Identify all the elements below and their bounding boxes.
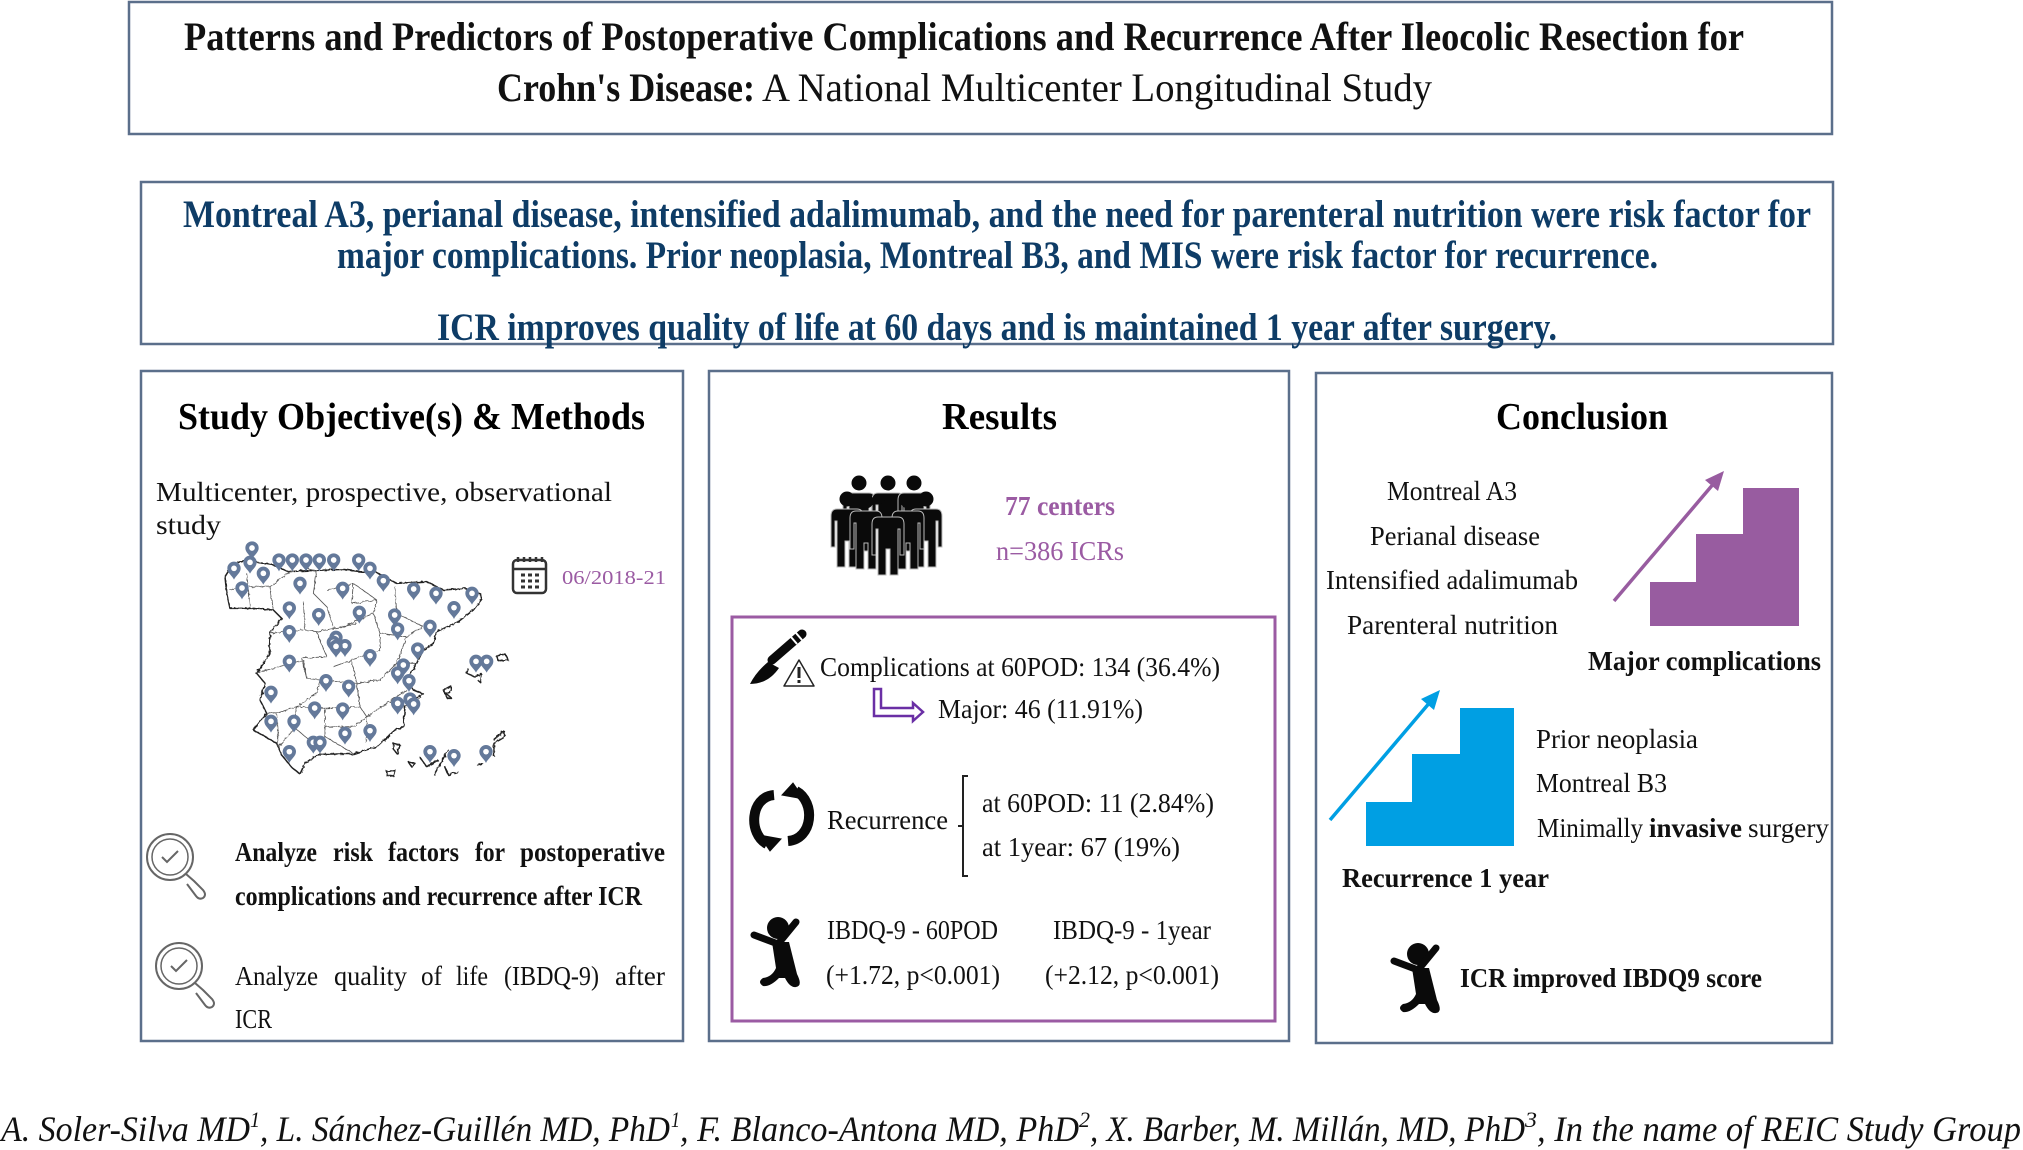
authors: , L. Sánchez-Guillén MD, PhD bbox=[260, 1109, 670, 1149]
recurrence label: Recurrence bbox=[827, 805, 948, 835]
IBDQ9 conclusion: ICR improved IBDQ9 score bbox=[1460, 963, 1762, 993]
authors: 2 bbox=[1079, 1107, 1090, 1132]
panel: study objectives and methods bbox=[141, 371, 683, 1041]
major complication risk factors bbox=[1326, 476, 1578, 640]
objective 1 text: postoperative bbox=[520, 837, 665, 867]
IBDQ-9 at 60POD bbox=[826, 915, 1000, 990]
sample size: n=386 ICRs bbox=[996, 536, 1124, 566]
objective 2 text: ICR bbox=[235, 1004, 272, 1034]
recurrence label: Recurrence 1 year bbox=[1342, 863, 1549, 893]
centers count: 77 centers bbox=[1005, 491, 1115, 521]
title box: Crohn's Disease: bbox=[497, 65, 755, 110]
recurrence risk factors: invasive bbox=[1649, 813, 1742, 843]
authors: 1 bbox=[250, 1107, 260, 1132]
title box: Patterns and Predictors of Postoperative Complications and Recurrence After Ileocolic Resection for bbox=[184, 14, 1744, 59]
title box: A National Multicenter Longitudinal Study bbox=[762, 65, 1432, 110]
objective 2 text: life bbox=[456, 961, 488, 991]
blue stairs bbox=[1366, 708, 1514, 846]
objective 2 text: after bbox=[615, 961, 665, 991]
key findings box: major complications. Prior neoplasia, Montreal B3, and MIS were risk factor for recurrence. bbox=[337, 234, 1658, 277]
objective 1 text: factors bbox=[388, 837, 459, 867]
recurrence risk factors: Prior neoplasia bbox=[1536, 724, 1698, 754]
objective 1 text bbox=[235, 837, 665, 911]
panel: conclusion bbox=[1316, 373, 1832, 1043]
authors bbox=[0, 1107, 2021, 1149]
objective 2 text: quality bbox=[334, 961, 407, 991]
major complication risk factors: Intensified adalimumab bbox=[1326, 565, 1578, 595]
recurrence at 1 year: at 1year: 67 (19%) bbox=[982, 832, 1180, 862]
icon: recurrence arrows bbox=[754, 783, 809, 851]
objective 1 text: Analyze bbox=[235, 837, 317, 867]
arrow to major complications bbox=[874, 689, 923, 721]
bracket bbox=[958, 776, 968, 876]
objective 2 text bbox=[235, 961, 665, 1034]
blue arrow bbox=[1330, 690, 1440, 820]
icon: jumping person bbox=[1394, 943, 1440, 1013]
major complication risk factors: Montreal A3 bbox=[1387, 476, 1517, 506]
objective 1 text: complications and recurrence after ICR bbox=[235, 881, 642, 911]
icon: group of people bbox=[831, 476, 942, 575]
recurrence risk factors: Minimally bbox=[1537, 813, 1643, 843]
title box bbox=[129, 2, 1832, 134]
objective 1 text: for bbox=[475, 837, 505, 867]
purple stairs bbox=[1650, 488, 1799, 626]
complications text: Complications at 60POD: 134 (36.4%) bbox=[820, 652, 1220, 682]
key findings box: Montreal A3, perianal disease, intensified adalimumab, and the need for parenteral nutrition were risk factor for bbox=[183, 193, 1811, 236]
recurrence risk factors: surgery bbox=[1748, 813, 1829, 843]
objective 2 text: Analyze bbox=[235, 961, 318, 991]
authors: A. Soler-Silva MD bbox=[0, 1109, 250, 1149]
icon: magnifier objective 1 bbox=[147, 834, 205, 899]
major complications text: Major: 46 (11.91%) bbox=[938, 694, 1143, 724]
icon: scalpel bbox=[750, 633, 802, 684]
major complications label: Major complications bbox=[1588, 646, 1821, 676]
panel: results bbox=[709, 371, 1289, 1041]
objective 2 text: (IBDQ-9) bbox=[504, 961, 599, 991]
authors: , F. Blanco-Antona MD, PhD bbox=[680, 1109, 1079, 1149]
panel: study objectives and methods: Multicenter, prospective, observational bbox=[156, 477, 612, 507]
IBDQ-9 at 60POD: (+1.72, p<0.001) bbox=[826, 960, 1000, 990]
recurrence at 60POD: at 60POD: 11 (2.84%) bbox=[982, 788, 1214, 818]
panel: study objectives and methods: Study Objective(s) & Methods bbox=[178, 396, 645, 438]
recurrence risk factors bbox=[1536, 724, 1829, 843]
key findings box bbox=[141, 182, 1833, 349]
recurrence risk factors: Montreal B3 bbox=[1536, 768, 1667, 798]
key findings box: ICR improves quality of life at 60 days and is maintained 1 year after surgery. bbox=[437, 306, 1557, 349]
results inner frame bbox=[732, 617, 1275, 1021]
objective 1 text: risk bbox=[333, 837, 373, 867]
study period: 06/2018-21 bbox=[562, 567, 666, 589]
IBDQ-9 at 1 year: IBDQ-9 - 1year bbox=[1053, 915, 1211, 945]
IBDQ-9 at 1 year bbox=[1045, 915, 1219, 990]
icon: calendar bbox=[513, 557, 546, 593]
authors: 1 bbox=[671, 1107, 680, 1132]
IBDQ-9 at 1 year: (+2.12, p<0.001) bbox=[1045, 960, 1219, 990]
map of Spain with centers bbox=[225, 541, 508, 776]
authors: , X. Barber, M. Millán, MD, PhD bbox=[1090, 1109, 1525, 1149]
objective 2 text: of bbox=[421, 961, 442, 991]
panel: conclusion: Conclusion bbox=[1496, 396, 1668, 438]
panel: study objectives and methods: study bbox=[156, 510, 222, 540]
authors: 3 bbox=[1524, 1107, 1537, 1132]
IBDQ-9 at 60POD: IBDQ-9 - 60POD bbox=[827, 915, 998, 945]
major complication risk factors: Perianal disease bbox=[1370, 521, 1540, 551]
major complication risk factors: Parenteral nutrition bbox=[1347, 610, 1559, 640]
icon: warning triangle bbox=[784, 660, 814, 686]
purple arrow bbox=[1614, 471, 1724, 601]
icon: jumping person bbox=[754, 917, 800, 987]
panel: results: Results bbox=[942, 396, 1057, 438]
icon: magnifier objective 2 bbox=[156, 943, 214, 1008]
